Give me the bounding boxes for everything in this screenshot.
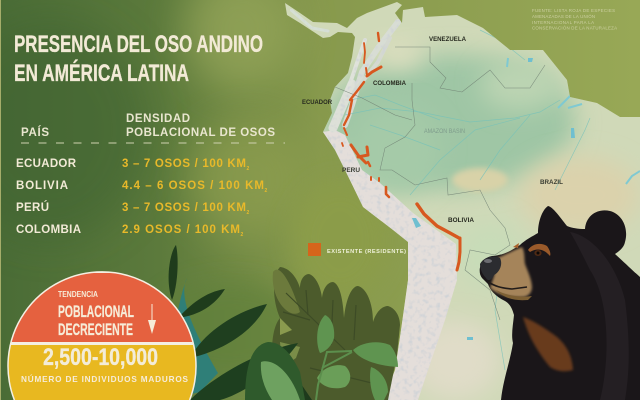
row: Ecuador: ECUADOR — [16, 158, 77, 170]
rivers and lakes — [345, 30, 590, 370]
table: population density by country — [16, 113, 285, 238]
chest orange patch — [523, 317, 573, 371]
trend text — [58, 290, 134, 339]
row: Bolivia: 2 — [264, 188, 268, 194]
map labels: VENEZUELA — [429, 37, 467, 43]
row: Ecuador — [16, 158, 250, 172]
fur body — [480, 206, 640, 400]
foliage illustration — [165, 245, 400, 400]
map labels: PERU — [342, 168, 360, 174]
bear illustration — [480, 206, 640, 400]
brow markings — [528, 244, 550, 256]
muzzle — [490, 247, 532, 297]
legend: existing (resident) range — [308, 243, 406, 256]
title: PRESENCIA DEL OSO ANDINO — [14, 31, 263, 58]
row: Colombia: 2 — [240, 232, 244, 238]
map labels: AMAZON BASIN — [424, 129, 465, 135]
eye — [534, 250, 542, 256]
green foreground sprigs — [317, 315, 334, 353]
row: Ecuador: 3 – 7 OSOS / 100 KM — [122, 158, 246, 170]
table headers — [21, 113, 275, 139]
map labels: ECUADOR — [302, 100, 333, 106]
source note: INTERNACIONAL PARA LA — [532, 20, 594, 25]
legend: existing (resident) range: EXISTENTE (RESIDENTE) — [327, 249, 406, 255]
land mass — [280, 0, 640, 400]
left dark leaves and teal leaf — [165, 278, 218, 400]
map labels: BOLIVIA — [448, 218, 475, 224]
row: Colombia: 2.9 OSOS / 100 KM — [122, 224, 240, 236]
trend text: DECRECIENTE — [58, 320, 133, 339]
country borders — [335, 47, 545, 320]
nose — [480, 256, 501, 280]
row: Bolivia — [16, 180, 268, 194]
count caption: NÚMERO DE INDIVIDUOS MADUROS — [21, 373, 189, 384]
arrow: downward trend — [148, 304, 156, 334]
Andes mountain strip — [290, 9, 457, 400]
source note: CONSERVACIÓN DE LA NATURALEZA — [532, 26, 617, 30]
olive leaves in front — [273, 270, 300, 314]
population trend badge — [8, 272, 196, 400]
row: Colombia: COLOMBIA — [16, 224, 81, 236]
source note: AMENAZADAS DE LA UNIÓN — [532, 14, 595, 19]
individuals count: 2,500-10,000 — [43, 344, 158, 371]
source note: FUENTE: LISTA ROJA DE ESPECIES — [532, 8, 615, 13]
title: EN AMÉRICA LATINA — [14, 59, 189, 87]
map labels: BRAZIL — [540, 180, 563, 186]
trend text: POBLACIONAL — [58, 302, 134, 321]
row: Peru — [16, 201, 250, 216]
row: Peru: PERÚ — [16, 201, 49, 214]
row: Bolivia: 4.4 – 6 OSOS / 100 KM — [122, 180, 264, 192]
map of South America — [280, 0, 640, 400]
table headers: DENSIDAD — [126, 113, 190, 125]
source note — [532, 8, 617, 30]
map labels — [302, 37, 563, 224]
map labels: COLOMBIA — [373, 81, 407, 87]
table headers: POBLACIONAL DE OSOS — [126, 127, 275, 139]
row: Bolivia: BOLIVIA — [16, 180, 68, 192]
row: Peru: 3 – 7 OSOS / 100 KM — [122, 202, 246, 214]
trend text: TENDENCIA — [58, 290, 98, 299]
olive oak leaf — [272, 267, 400, 400]
title — [14, 31, 263, 87]
big green leaf — [245, 342, 305, 400]
range: existent bear habitat — [342, 33, 460, 270]
row: Ecuador: 2 — [246, 166, 250, 172]
row: Colombia — [16, 224, 244, 238]
row: Peru: 2 — [246, 210, 250, 216]
table headers: PAÍS — [21, 126, 49, 139]
